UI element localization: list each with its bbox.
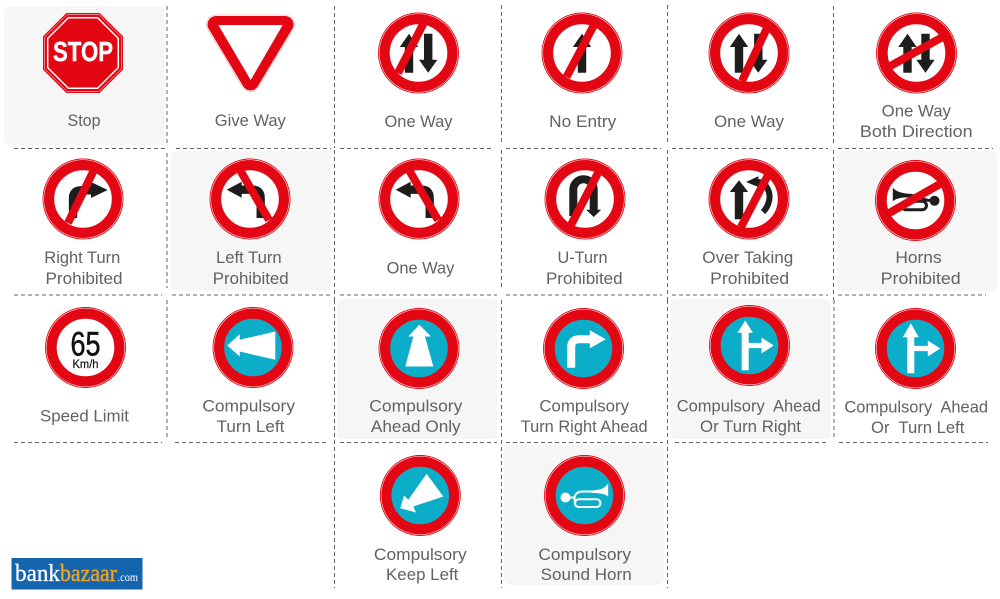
icon: white fork arrow — [876, 308, 956, 388]
sign: compulsory ahead or turn right — [677, 306, 821, 436]
label: One Way — [714, 112, 784, 131]
label: Right Turn — [44, 248, 120, 267]
sign: left turn prohibited — [210, 159, 290, 288]
icon: white wedge arrow up — [379, 308, 459, 388]
icon: up arrow with slash — [542, 13, 622, 93]
label: Prohibited — [710, 269, 789, 288]
label: Prohibited — [213, 269, 289, 288]
label: Compulsory — [202, 396, 296, 415]
label: Turn Right Ahead — [521, 417, 648, 436]
label: One Way — [882, 102, 951, 121]
sign: compulsory turn right ahead — [521, 308, 648, 436]
label: Compulsory Ahead — [677, 396, 821, 415]
sign: one way, right arrow struck — [709, 13, 789, 131]
icon: left turn arrow with slash — [210, 159, 290, 239]
logo: bankbazaar.com: .com — [118, 570, 139, 584]
label: Prohibited — [546, 269, 623, 288]
icon: two arrows with slash — [378, 13, 458, 93]
label — [202, 396, 296, 436]
sign: one way, left turn struck — [379, 159, 459, 277]
logo: bankbazaar.com — [12, 558, 142, 590]
icon: right turn arrow with slash — [43, 159, 123, 239]
panel: stop highlight — [4, 6, 165, 145]
icon: white right turn arrow — [544, 308, 624, 388]
sign: compulsory keep left — [374, 456, 467, 584]
sign: stop — [43, 13, 123, 130]
sign: give way — [215, 24, 286, 130]
label: Ahead Only — [371, 417, 461, 436]
label: Give Way — [215, 111, 286, 130]
logo: bankbazaar.com: bank — [15, 561, 60, 587]
sign: one way, left arrow struck — [378, 13, 458, 131]
label: Speed Limit — [40, 406, 129, 425]
label — [702, 248, 793, 288]
label — [881, 248, 961, 288]
label — [374, 545, 467, 584]
label: Keep Left — [386, 565, 459, 584]
label: Prohibited — [46, 269, 122, 288]
label — [521, 396, 648, 436]
label — [213, 248, 289, 288]
label: Horns — [895, 248, 942, 267]
label: U-Turn — [558, 248, 608, 267]
label — [844, 397, 988, 437]
sign: compulsory turn left — [202, 308, 296, 436]
panel: compulsory ahead only highlight — [337, 299, 497, 439]
label: Turn Left — [217, 417, 285, 436]
sign: one way both direction — [860, 13, 973, 141]
label: Both Direction — [860, 122, 973, 141]
icon: stop octagon: STOP — [53, 36, 113, 67]
sign: u-turn prohibited — [545, 159, 625, 288]
label: Compulsory — [538, 545, 632, 564]
label — [369, 396, 463, 436]
label — [860, 102, 973, 141]
icon: u-turn arrow with slash — [545, 159, 625, 239]
panel: compulsory sound horn highlight — [504, 445, 664, 585]
label: Left Turn — [216, 248, 282, 267]
icon: white fork arrow — [710, 306, 790, 386]
panel: horns prohibited highlight — [837, 151, 997, 291]
icon: white wedge arrow left — [213, 308, 293, 388]
label: Or Turn Left — [871, 418, 965, 437]
label — [677, 396, 821, 436]
icon: white diagonal wedge arrow — [380, 456, 460, 536]
icon: 65 km/h: Km/h — [72, 357, 98, 371]
icon: two arrows with horizontal slash — [876, 13, 956, 93]
sign: horns prohibited — [876, 160, 961, 288]
label: One Way — [387, 258, 455, 277]
sign: speed limit — [40, 308, 129, 425]
panel: left turn prohibited highlight — [171, 151, 331, 291]
icon: 65 km/h — [46, 308, 126, 388]
icon: give way triangle — [216, 24, 285, 82]
icon: straight and curved arrows with slash — [709, 159, 789, 239]
label — [44, 248, 122, 288]
label: Compulsory — [539, 396, 630, 415]
sign: over taking prohibited — [702, 159, 793, 288]
panel: compulsory ahead or turn right highlight — [671, 299, 831, 439]
icon: horn with slash — [876, 160, 956, 240]
label: No Entry — [549, 112, 617, 131]
label: Sound Horn — [541, 565, 632, 584]
label: Stop — [68, 111, 100, 130]
label: Compulsory Ahead — [844, 397, 988, 416]
icon: white horn — [544, 456, 624, 536]
label: One Way — [384, 112, 453, 131]
icon: left turn arrow with slash — [379, 159, 459, 239]
sign: compulsory sound horn — [538, 456, 632, 584]
label: Over Taking — [702, 248, 793, 267]
icon: 65 km/h: 65 — [70, 325, 100, 363]
sign: compulsory ahead only — [369, 308, 463, 436]
sign: no entry — [542, 13, 622, 131]
icon: two arrows with slash — [709, 13, 789, 93]
sign: right turn prohibited — [43, 159, 123, 288]
label: Or Turn Right — [700, 417, 801, 436]
label — [538, 545, 632, 584]
logo: bankbazaar.com: bazaar — [60, 561, 117, 587]
sign: compulsory ahead or turn left — [844, 308, 988, 437]
label: Compulsory — [374, 545, 467, 564]
label: Compulsory — [369, 396, 463, 415]
label: Prohibited — [881, 269, 961, 288]
label — [546, 248, 623, 288]
